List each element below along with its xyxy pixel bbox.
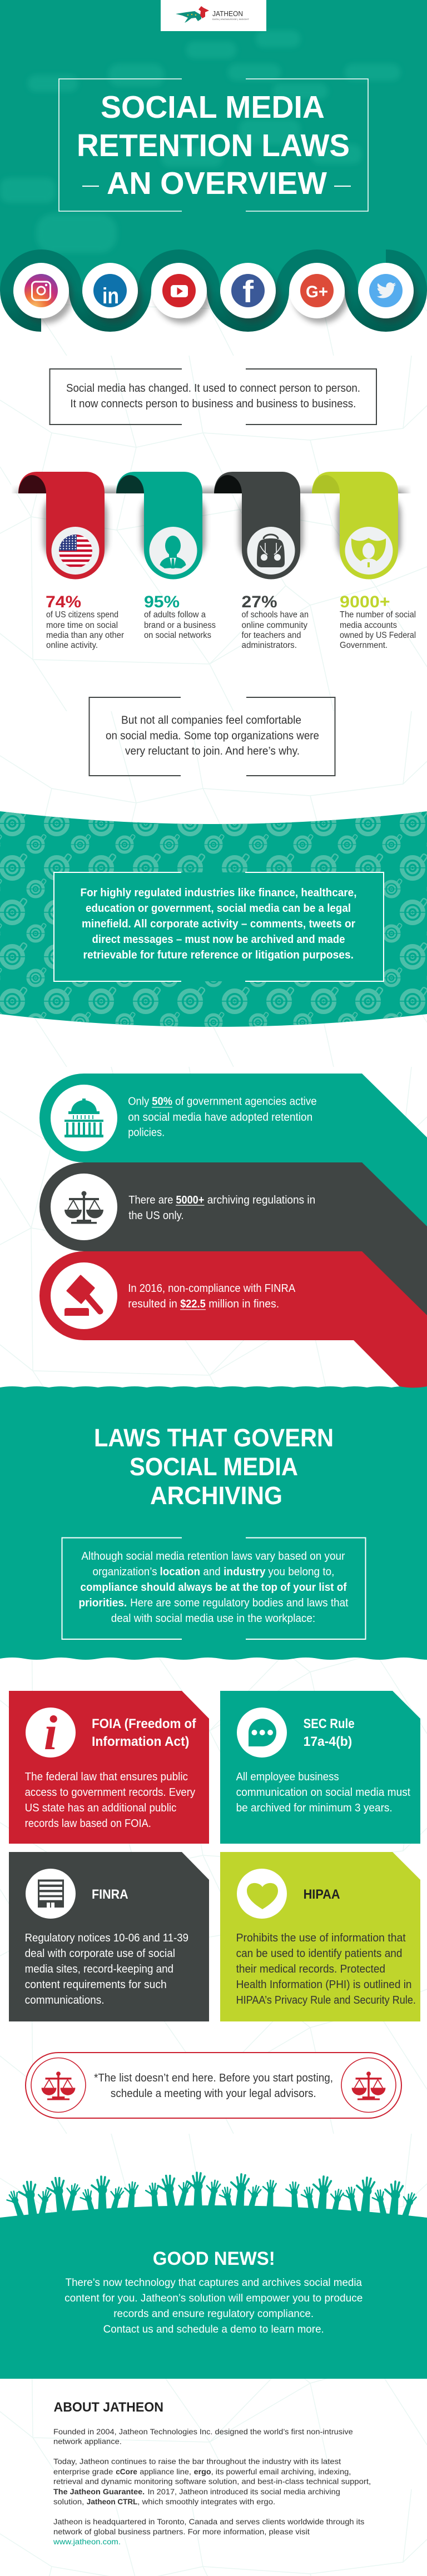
icon: capitol building [64, 1099, 103, 1137]
stat: 95% [144, 593, 216, 640]
reluctance text box: But not all companies feel comfortable [121, 713, 301, 727]
stat: 27%: of schools have an [241, 610, 309, 620]
panel: 5000+ regulations banner [39, 1162, 427, 1334]
stat: 9000+: media accounts [340, 621, 397, 630]
icon: facebook: f [242, 274, 254, 309]
about jatheon: Founded in 2004, Jatheon Technologies Inc. designed the world’s first non-intrusive [53, 2427, 353, 2436]
icon: fox logo mark [176, 6, 209, 23]
panel: FINRA card: FINRA [92, 1887, 128, 1902]
stat: 95%: of adults follow a [144, 610, 206, 620]
panel: regulated industries band: direct messages – must now be archived and made [92, 933, 345, 946]
stat: 74%: online activity. [46, 641, 98, 650]
panel: 5000+ regulations banner: the US only. [128, 1209, 184, 1222]
about jatheon: Today, Jatheon continues to raise the bar throughout the industry with its latest [53, 2457, 341, 2466]
intro text box: It now connects person to business and business to business. [70, 397, 356, 410]
about jatheon: cCore [116, 2467, 137, 2476]
panel: non-compliance fines banner [39, 1251, 427, 1388]
icon: business person [160, 536, 186, 568]
panel: good news: GOOD NEWS! [153, 2248, 275, 2269]
stat: 9000+: The number of social [340, 610, 416, 620]
stat: 9000+ [340, 593, 416, 650]
stat: 74%: media than any other [46, 631, 124, 640]
panel: FOIA card [9, 1691, 209, 1844]
about jatheon: Jatheon is headquartered in Toronto, Canada and serves clients worldwide through its [53, 2517, 364, 2526]
icon: google plus [289, 263, 345, 318]
stat: 74% [46, 593, 124, 650]
about jatheon: www.jatheon.com. [53, 2537, 121, 2546]
icon: government shield [351, 538, 386, 567]
logo tagline: DATA | KNOWLEDGE | INSIGHT [212, 18, 250, 21]
social media icon wave [0, 249, 427, 332]
icon: us flag [59, 535, 92, 568]
about jatheon: enterprise grade [53, 2467, 113, 2476]
callout: legal advisors: *The list doesn’t end here. Before you start posting, [94, 2071, 333, 2084]
icon: twitter [358, 263, 414, 318]
text box: compliance intro: compliance should always be at the top of your list of [80, 1581, 347, 1594]
panel: good news [0, 2205, 427, 2379]
panel: SEC rule card: be archived for minimum 3 years. [236, 1801, 393, 1814]
panel: FOIA card: FOIA (Freedom of [92, 1716, 197, 1731]
panel: SEC rule card: communication on social media must [236, 1786, 410, 1799]
text box: compliance intro: organization’s [92, 1565, 157, 1578]
intro text box: Social media has changed. It used to connect person to person. [66, 382, 360, 395]
panel: HIPAA card: their medical records. Protected [236, 1963, 385, 1975]
about jatheon: , which smoothly integrates with ergo. [137, 2497, 275, 2506]
panel: FOIA card: access to government records. Every [25, 1786, 196, 1799]
header panel [0, 0, 427, 291]
panel: HIPAA card: can be used to identify patients and [236, 1947, 402, 1960]
about jatheon: network of global business partners. For more information, please visit [53, 2527, 310, 2536]
panel: regulated industries band [0, 811, 427, 1027]
stat: 27%: for teachers and [241, 631, 301, 640]
logo wordmark: JATHEON [212, 9, 243, 18]
stat: 9000+: owned by US Federal [340, 631, 416, 640]
text box: compliance intro: industry [224, 1565, 266, 1578]
panel: FINRA card: Regulatory notices 10-06 and 11-39 [25, 1931, 188, 1944]
about jatheon: retrieval and dynamic monitoring software solution, and best-in-class technical support, [53, 2477, 371, 2486]
panel: 50% of agencies banner: on social media have adopted retention [128, 1111, 312, 1124]
icon: linkedin [82, 263, 138, 318]
shelf shadow [11, 485, 411, 493]
stat: 74%: of US citizens spend [46, 610, 118, 620]
panel: HIPAA card: Prohibits the use of information that [236, 1931, 406, 1944]
about jatheon: , its powerful email archiving, indexing, [211, 2467, 351, 2476]
title [59, 79, 368, 211]
heading: laws that govern: SOCIAL MEDIA [130, 1452, 298, 1481]
stat: 27% [241, 593, 309, 650]
stat: 9000+: 9000+ [340, 593, 390, 611]
panel: regulated industries band: For highly regulated industries like finance, healthcare, [80, 887, 357, 899]
about jatheon: ergo [194, 2467, 211, 2476]
about jatheon: network appliance. [53, 2437, 122, 2446]
text box: compliance intro: Here are some regulatory bodies and laws that [130, 1596, 349, 1609]
panel: regulated industries band: retrievable for future reference or litigation purposes. [83, 949, 354, 961]
panel: SEC rule card: 17a-4(b) [304, 1734, 352, 1749]
stat: 27%: 27% [241, 593, 277, 611]
panel: FINRA card: communications. [25, 1994, 105, 2006]
panel: good news: records and ensure regulatory compliance. [113, 2308, 314, 2320]
text box: compliance intro: priorities. [79, 1596, 127, 1609]
text box: compliance intro [62, 1538, 366, 1639]
panel: good news: There’s now technology that captures and archives social media [66, 2277, 362, 2289]
callout: legal advisors: schedule a meeting with your legal advisors. [111, 2087, 316, 2100]
icon: info: i [44, 1706, 58, 1760]
panel: non-compliance fines banner: $22.5 [180, 1297, 206, 1310]
stat: 74%: 74% [46, 593, 81, 611]
stat: 95%: on social networks [144, 631, 211, 640]
panel: non-compliance fines banner: million in fines. [208, 1297, 279, 1310]
panel: 5000+ regulations banner: 5000+ [176, 1194, 204, 1206]
icon: chat bubble [249, 1719, 276, 1746]
panel: HIPAA card: Health Information (PHI) is outlined in [236, 1978, 411, 1991]
panel: ribbon 74% [18, 472, 107, 579]
text box: compliance intro: Although social media retention laws vary based on your [81, 1550, 345, 1562]
stat: 27%: administrators. [241, 641, 297, 650]
icon: instagram [13, 263, 69, 318]
panel: 5000+ regulations banner: archiving regulations in [207, 1194, 315, 1206]
panel: HIPAA card [220, 1852, 420, 2021]
icon: google plus: G+ [306, 283, 328, 301]
panel: 50% of agencies banner: Only [128, 1095, 150, 1108]
title: RETENTION LAWS [77, 128, 350, 163]
icon: scales right [352, 2071, 385, 2100]
about jatheon: The Jatheon Guarantee. [53, 2487, 145, 2496]
panel: FOIA card: Information Act) [92, 1734, 189, 1749]
icon: scales of justice [64, 1191, 103, 1224]
panel: FOIA card: records law based on FOIA. [25, 1817, 151, 1830]
icon: gavel [64, 1276, 100, 1316]
icon: backpack [257, 535, 285, 567]
panel: FINRA card: deal with corporate use of social [25, 1947, 175, 1960]
panel: regulated industries band: education or government, social media can be a legal [86, 902, 351, 915]
icon: linkedin: in [102, 284, 119, 308]
icon: office building [38, 1879, 64, 1908]
reluctance text box [89, 697, 335, 776]
panel: FINRA card [9, 1852, 209, 2021]
heading: laws that govern: LAWS THAT GOVERN [94, 1424, 334, 1452]
panel: laws section [0, 1386, 427, 1660]
reluctance text box: very reluctant to join. And here’s why. [125, 745, 300, 757]
panel: ribbon 9000+ [312, 472, 401, 579]
callout: legal advisors [26, 2053, 401, 2118]
icon: heart [247, 1883, 278, 1909]
panel: 50% of agencies banner: 50% [152, 1095, 172, 1108]
text box: compliance intro: you belong to, [268, 1565, 334, 1578]
stat: 95%: brand or a business [144, 621, 216, 630]
logo [161, 0, 266, 31]
icon: facebook [220, 263, 276, 318]
panel: FINRA card: media sites, record-keeping and [25, 1963, 173, 1975]
panel: HIPAA card: HIPAA [304, 1887, 340, 1902]
panel: 50% of agencies banner: of government agencies active [175, 1095, 317, 1108]
about jatheon: In 2017, Jatheon introduced its social media archiving [148, 2487, 340, 2496]
about jatheon: solution, [53, 2497, 84, 2506]
about jatheon: appliance line, [140, 2467, 191, 2476]
intro text box [50, 369, 376, 425]
panel: SEC rule card: SEC Rule [304, 1716, 355, 1731]
stat: 27%: online community [241, 621, 307, 630]
raised hands illustration [5, 2173, 417, 2229]
panel: regulated industries band: minefield. All corporate activity – comments, tweets or [82, 918, 355, 930]
panel: non-compliance fines banner: resulted in [128, 1297, 177, 1310]
panel: 50% of agencies banner [39, 1074, 427, 1278]
about jatheon [53, 2400, 371, 2546]
text box: compliance intro: deal with social media use in the workplace: [111, 1612, 315, 1625]
title: SOCIAL MEDIA [101, 89, 325, 125]
panel: good news: Contact us and schedule a demo to learn more. [103, 2323, 324, 2335]
heading: laws that govern [94, 1424, 334, 1510]
stat: 9000+: Government. [340, 641, 388, 650]
icon: scales left [42, 2071, 75, 2100]
panel: SEC rule card [220, 1691, 420, 1844]
heading: laws that govern: ARCHIVING [150, 1481, 282, 1510]
panel: ribbon 95% [116, 472, 205, 579]
panel: SEC rule card: All employee business [236, 1770, 339, 1783]
panel: FOIA card: US state has an additional public [25, 1801, 176, 1814]
text box: compliance intro: and [203, 1565, 221, 1578]
title: AN OVERVIEW [107, 166, 327, 201]
panel: non-compliance fines banner: In 2016, non-compliance with FINRA [128, 1282, 295, 1295]
text box: compliance intro: location [160, 1565, 200, 1578]
stat: 95%: 95% [144, 593, 180, 611]
icon: youtube [151, 263, 207, 318]
panel: ribbon 27% [214, 472, 303, 579]
about jatheon: Jatheon CTRL [87, 2497, 138, 2506]
panel: 5000+ regulations banner: There are [128, 1194, 173, 1206]
stat: 74%: more time on social [46, 621, 118, 630]
panel: FOIA card: The federal law that ensures public [25, 1770, 188, 1783]
panel: good news: content for you. Jatheon’s solution will empower you to produce [64, 2292, 363, 2304]
reluctance text box: on social media. Some top organizations were [106, 729, 319, 742]
about jatheon: ABOUT JATHEON [53, 2400, 163, 2415]
panel: FINRA card: content requirements for such [25, 1978, 167, 1991]
panel: 50% of agencies banner: policies. [128, 1126, 165, 1139]
